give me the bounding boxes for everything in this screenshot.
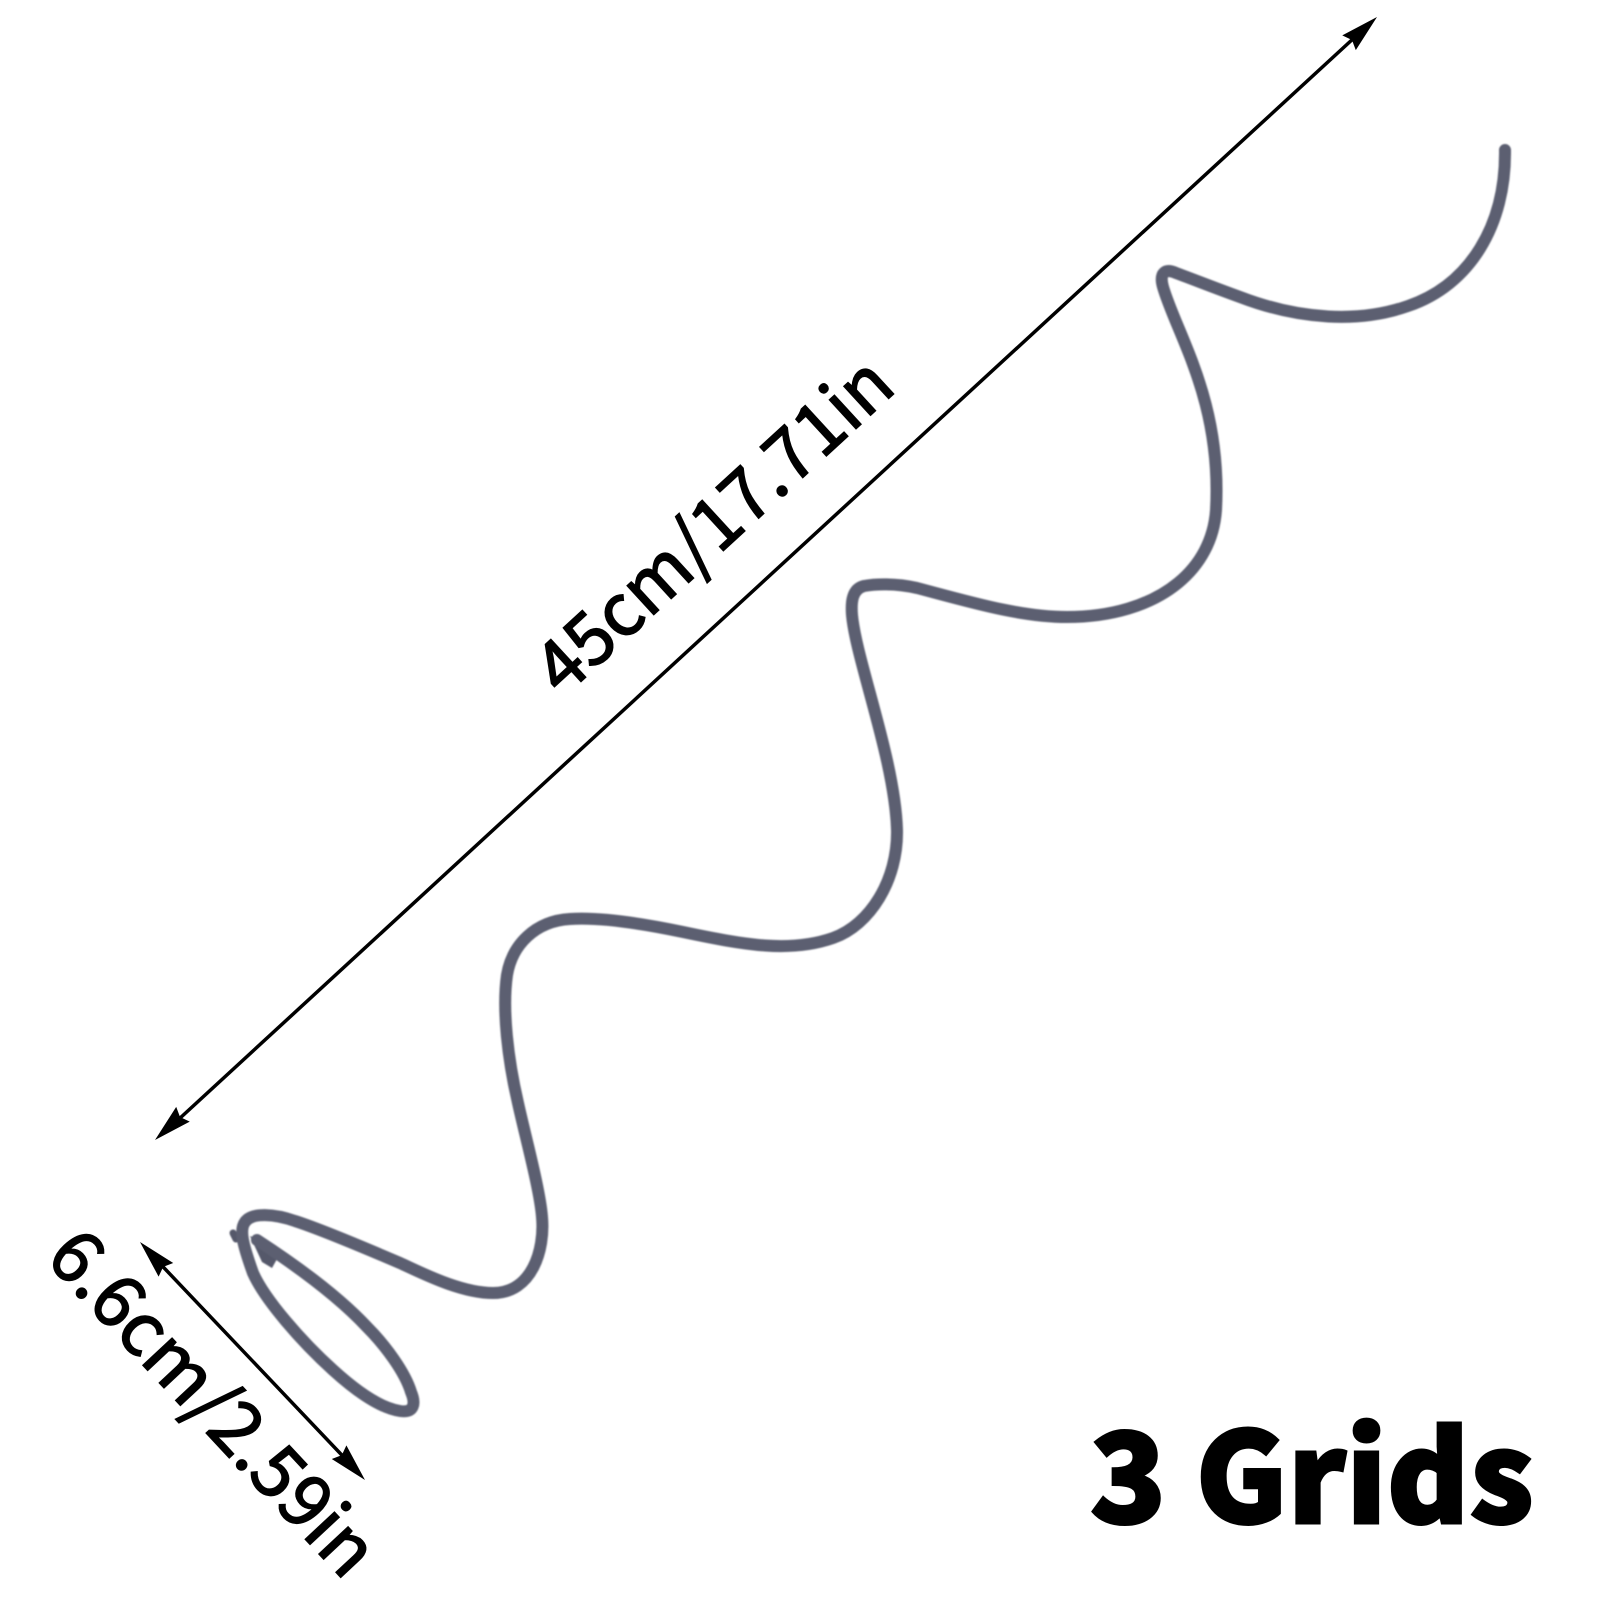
arrow: 6.6cm diameter dimension [133, 1235, 372, 1487]
label: 6.6cm/2.59in: 6.6cm/2.59in [28, 1202, 406, 1597]
label: 45cm/17.71in: 45cm/17.71in [506, 328, 912, 713]
heading: 3 Grids: 3 Grids [1090, 1378, 1534, 1559]
spiral wire plant support [233, 150, 1505, 1411]
arrow: 45cm length dimension [148, 10, 1384, 1147]
